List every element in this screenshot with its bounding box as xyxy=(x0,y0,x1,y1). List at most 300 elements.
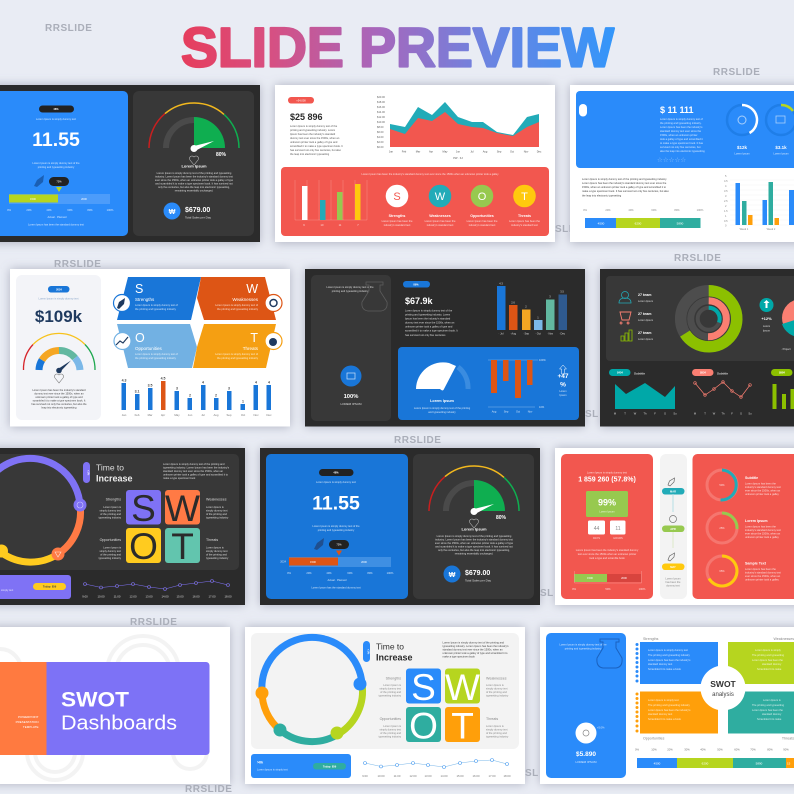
line chart: Th xyxy=(721,412,725,416)
panel: donut: Lorem Ipsum xyxy=(638,299,653,303)
panel: blue gauge: % xyxy=(560,382,566,388)
panel: red KPI: 50% xyxy=(605,587,611,591)
panel: ring and SWOT: of the printing and xyxy=(486,690,507,694)
panel: ring and SWOT: simply dummy text xyxy=(380,728,401,732)
panel: ring and SWOT: standard dummy text ever since the 1500s, when an xyxy=(163,469,224,473)
line chart: W xyxy=(713,412,716,416)
SWOT hexagons: Lorem Ipsum is simply dummy text of xyxy=(215,352,258,356)
slide 12: SWOT analysis: 70% xyxy=(750,748,756,752)
panel: gauge: Lorem Ipsum xyxy=(181,164,207,168)
bar chart: 1 xyxy=(537,316,539,320)
panel: blue KPI: Lorem Ipsum is simply dummy text of the xyxy=(312,524,360,528)
panel: gauge KPI: has survived not only five centuries, but also the xyxy=(31,402,87,406)
SWOT quadrants: Lorem Ipsum has been the xyxy=(752,658,783,662)
panel: blue flask KPI: LOREM IPSUM xyxy=(575,760,597,764)
panel: red SWOT: Lorem Ipsum has been the xyxy=(425,219,456,223)
panel: donut: Lorem Ipsum xyxy=(638,318,653,322)
panel: blue KPI: 1500 xyxy=(30,197,36,201)
bar chart: 5 xyxy=(725,174,727,178)
slide 5: dark bars and blue panel: dummy text ever since the 1500s, when an xyxy=(405,320,455,324)
line chart: 18:00 xyxy=(224,594,232,598)
panel: ring and SWOT: T xyxy=(451,706,474,746)
panel: flask KPI: printing and typesetting industry xyxy=(332,289,369,293)
SWOT quadrants: standard dummy xyxy=(762,662,782,666)
area chart: PW · KJ xyxy=(453,156,463,160)
monthly bar chart: Jul xyxy=(201,413,205,417)
panel: blue gauge: Lorem Ipsum is simply dummy text of the printing xyxy=(414,406,471,410)
SWOT quadrants: Threats xyxy=(782,736,794,740)
SWOT hexagons: Lorem Ipsum is simply dummy text of xyxy=(135,352,178,356)
panel: blue KPI: Actual · Planned xyxy=(327,578,347,582)
slide 5: dark bars and blue panel: $67.9k xyxy=(405,296,434,306)
panel: red KPI: 44 xyxy=(594,526,599,532)
panel: gauge: 80% xyxy=(496,515,507,521)
panel: red SWOT: S xyxy=(393,191,401,203)
monthly bar chart: 3 xyxy=(176,386,178,390)
panel: red SWOT: 7 xyxy=(357,223,359,227)
panel: red KPI: 99% xyxy=(598,498,616,508)
bar chart xyxy=(497,282,567,336)
panel: ring and SWOT: Increase xyxy=(376,652,413,662)
panel: gauge: ₩ xyxy=(449,572,456,579)
SWOT quadrants: standard dummy xyxy=(762,712,782,716)
panel: blue header: ☆☆☆☆☆ xyxy=(657,156,686,164)
watermarks: RRSLIDE xyxy=(674,253,721,264)
SWOT quadrants: Lorem Ipsum has been the industry's xyxy=(648,658,691,662)
area chart: Oct xyxy=(510,150,514,154)
area chart: Th xyxy=(643,412,647,416)
slide 3: blue header with rings: Lorem Ipsum is simply dummy text of the printing and typesetting industry. xyxy=(582,177,667,181)
monthly bar chart: Dec xyxy=(267,413,272,417)
bar chart: 3.5 xyxy=(724,189,728,193)
slide 3: blue header with rings xyxy=(570,85,794,242)
slide 6: donut dashboard xyxy=(600,269,794,426)
area chart: $12.00 xyxy=(377,115,385,119)
line chart: T xyxy=(704,412,706,416)
panel: gauge KPI: unknown printer took a galley of type and xyxy=(35,395,83,399)
panel: gauge: only five centuries, but also the leap into electronic typesetting, xyxy=(438,548,510,552)
watermarks: SLI xyxy=(555,224,572,235)
panel: ring and SWOT: Opportunities xyxy=(100,538,121,542)
line chart: 13:00 xyxy=(146,594,153,598)
SWOT quadrants: Lorem Ipsum is xyxy=(763,698,781,702)
panel: ring and SWOT xyxy=(0,454,239,570)
panel: red SWOT: Opportunities xyxy=(470,214,494,218)
bar chart: 2.5 xyxy=(724,199,728,203)
panel: ring and SWOT: simply dummy text xyxy=(380,686,401,690)
area chart: Su xyxy=(673,412,677,416)
panel: ring and SWOT: of the printing and xyxy=(486,731,507,735)
panel: ring and SWOT: simply dummy text xyxy=(486,686,508,690)
panel: blue KPI xyxy=(0,91,128,236)
panel: blue flask KPI xyxy=(546,633,626,778)
area chart: Jul xyxy=(470,150,474,154)
slide 5: dark bars and blue panel: 89% xyxy=(413,282,419,286)
area chart xyxy=(614,383,677,416)
panel: blue KPI: 2024 xyxy=(280,560,287,564)
panel: blue KPI: 0% xyxy=(287,571,292,575)
panel: timeline: has been the xyxy=(666,580,681,584)
SWOT hexagons: Weaknesses xyxy=(232,297,259,302)
panel: blue KPI: 1500 xyxy=(310,560,316,564)
panel: progress rings: unknown printer took a galley xyxy=(745,578,779,582)
orange band: PRESENTATION xyxy=(16,720,38,724)
panel: ring and SWOT: of the printing and xyxy=(380,690,402,694)
SWOT quadrants: The printing and typesetting xyxy=(752,653,785,657)
panel: ring and SWOT: Increase xyxy=(96,474,133,484)
panel: ring and SWOT: Lorem Ipsum is xyxy=(383,724,402,728)
bar chart: 4.3 xyxy=(499,282,503,286)
SWOT quadrants: Scrambled it to make a book xyxy=(648,717,682,721)
green bars xyxy=(772,384,794,409)
panel: gauge KPI: Lorem Ipsum has been the industry's standard xyxy=(32,388,86,392)
panel: ring and SWOT: of the printing and xyxy=(100,512,122,516)
area chart: $14.00 xyxy=(377,110,385,114)
panel: timeline: MAY xyxy=(670,565,676,569)
monthly bar chart: 4 xyxy=(255,380,257,384)
panel: progress rings: Sample Text xyxy=(745,562,767,566)
SWOT quadrants: Scrambled it to make a book xyxy=(648,667,682,671)
panel: red KPI: DAYS xyxy=(593,536,600,540)
line chart: 9:00 xyxy=(362,774,368,778)
panel: blue KPI: 11.55 xyxy=(32,129,80,151)
panel: gauge: Lorem Ipsum is simply dummy text of the printing and typesetting xyxy=(157,171,232,175)
panel: blue KPI: 60% xyxy=(347,571,353,575)
panel: progress rings: unknown printer took a galley xyxy=(745,492,779,496)
panel: ring and SWOT: Lorem Ipsum is xyxy=(206,505,224,509)
slide 2: area chart and SWOT: dummy text ever since the 1500s, when an xyxy=(290,136,340,140)
slide 2: area chart and SWOT: unknown printer took a galley of type and xyxy=(290,140,338,144)
line chart: 11:00 xyxy=(114,594,121,598)
line chart: 12:00 xyxy=(410,774,417,778)
area chart: Jun xyxy=(456,150,461,154)
line chart: M xyxy=(694,412,696,416)
line chart xyxy=(82,580,232,598)
panel: ring and SWOT: typesetting industry xyxy=(379,694,402,698)
slide 6: donut dashboard: Subtitle xyxy=(634,372,645,376)
bar chart: · Jul xyxy=(499,332,504,336)
slide 12: SWOT analysis: 10% xyxy=(651,748,657,752)
panel: progress rings: industry's standard dummy text xyxy=(745,528,781,532)
panel: blue KPI: 100% xyxy=(387,571,394,575)
panel: ring and SWOT: make a type specimen book xyxy=(163,476,196,480)
panel: blue header: Lorem Ipsum xyxy=(734,152,750,156)
panel: blue KPI: Lorem Ipsum is simply dummy text xyxy=(36,117,76,121)
callout: today: simply text xyxy=(1,588,14,592)
slide 5: dark bars and blue panel: printing and typesetting industry. Lorem xyxy=(405,312,450,316)
slide 2: area chart and SWOT: scrambled it to make a type specimen book. It xyxy=(290,144,343,148)
SWOT quadrants: Lorem Ipsum is simply text xyxy=(648,698,679,702)
slide 12: SWOT analysis: 60% xyxy=(734,748,740,752)
panel: gauge: and scrambled it to make a type specimen book. It has survived not xyxy=(155,182,233,186)
panel: timeline xyxy=(660,454,687,599)
panel: ring and SWOT: Threats xyxy=(206,538,218,542)
area chart: F xyxy=(654,412,656,416)
panel: ring and SWOT: typesetting industry xyxy=(486,734,509,738)
panel: blue KPI xyxy=(266,454,408,599)
line chart: 9:00 xyxy=(82,594,88,598)
SWOT quadrants: Lorem Ipsum has been the industry's xyxy=(648,708,691,712)
callout: today: Lorem Ipsum is simply text xyxy=(257,768,288,772)
panel: blue gauge: and typesetting industry xyxy=(428,410,456,414)
SWOT hexagons: T xyxy=(250,331,258,345)
slide 3: blue header with rings: 60% xyxy=(651,208,657,212)
panel: blue gauge: Ipsum xyxy=(559,393,567,397)
monthly bar chart: 4 xyxy=(202,380,204,384)
panel: blue KPI: 48% xyxy=(333,470,339,474)
callout: today: >Ilk xyxy=(257,760,263,764)
bar chart: 4 xyxy=(725,184,727,188)
bar chart: 1 xyxy=(725,214,727,218)
stacked bar xyxy=(585,218,700,228)
panel: red SWOT: Threats xyxy=(518,214,531,218)
area chart: $18.00 xyxy=(377,100,385,104)
bar chart: · Aug xyxy=(510,332,517,336)
monthly bar chart: Oct xyxy=(241,413,245,417)
panel: progress rings: Lorem Ipsum has been the xyxy=(745,482,776,486)
panel: blue gauge: 10% xyxy=(539,405,545,409)
stacked bar: 6200 xyxy=(702,762,709,766)
purple heading: Dashboards xyxy=(61,712,177,734)
SWOT quadrants: Lorem Ipsum is simply xyxy=(755,648,782,652)
panel: donut: 27 team xyxy=(638,312,651,316)
slide 12: SWOT analysis: 0% xyxy=(635,748,640,752)
slide 2: area chart and SWOT: $25 896 xyxy=(290,112,323,122)
SWOT hexagons: Lorem Ipsum is simply dummy text of xyxy=(215,303,258,307)
panel: blue gauge: Aug xyxy=(492,410,497,414)
panel: ring and SWOT: Lorem Ipsum is simply dummy text of the printing and xyxy=(163,462,225,466)
panel: red SWOT: Lorem Ipsum has been the xyxy=(509,219,540,223)
panel: red KPI: 2000 xyxy=(621,576,627,580)
line chart: 10:00 xyxy=(378,774,385,778)
bar chart: · Nov xyxy=(547,332,554,336)
line chart: 15:00 xyxy=(176,594,184,598)
panel: progress rings: ever since the 1500s, when an xyxy=(745,574,781,578)
panel: red SWOT: 9 xyxy=(303,223,305,227)
area chart: $4.00 xyxy=(377,135,384,139)
panel: timeline: MAR xyxy=(670,490,676,494)
slide 3: blue header with rings: the leap into electronic typesetting xyxy=(582,194,622,198)
panel: red SWOT: Weaknesses xyxy=(429,214,451,218)
bar chart: · Dec xyxy=(559,332,566,336)
panel: blue KPI: 0% xyxy=(7,208,12,212)
stacked bar: 4500 xyxy=(654,762,661,766)
panel: timeline: Lorem Ipsum xyxy=(665,576,681,580)
panel: progress rings: 50% xyxy=(719,483,725,487)
slide 2: area chart and SWOT: printing and typesetting industry. Lorem xyxy=(290,128,335,132)
panel: ring and SWOT: Lorem Ipsum is xyxy=(486,724,504,728)
slide 6: donut dashboard: $454 xyxy=(617,370,623,374)
SWOT quadrants: Strengths xyxy=(643,637,659,641)
panel: blue gauge: Lorem Ipsum xyxy=(430,399,455,403)
watermarks: SL xyxy=(540,588,554,599)
panel: ring and SWOT: W xyxy=(445,667,480,708)
panel: blue header: the printing and typesetting industry. xyxy=(660,121,702,125)
line chart: 15:00 xyxy=(456,774,464,778)
SWOT quadrants: Scrambled it to make xyxy=(757,667,782,671)
SWOT quadrants: analysis xyxy=(712,692,734,698)
panel: gauge: Total Sales per Day xyxy=(185,216,212,220)
panel: ring and SWOT: simply dummy text xyxy=(206,508,228,512)
panel: blue header: $ 11 111 xyxy=(660,105,694,115)
panel: donut: Lorem Ipsum xyxy=(638,337,653,341)
stacked bar: 15 xyxy=(787,762,791,766)
panel: ring and SWOT: W xyxy=(165,488,200,529)
SWOT quadrants: standard dummy text xyxy=(648,662,672,666)
slide 5: dark bars and blue panel: scrambled it to make a type specimen book. It xyxy=(405,328,458,332)
monthly bar chart: 4.5 xyxy=(161,376,165,380)
panel: ring and SWOT: Lorem Ipsum is xyxy=(103,546,122,550)
panel: red KPI: 1500 xyxy=(587,576,593,580)
panel: gauge: and scrambled it to make a type specimen book. It has survived not xyxy=(435,544,513,548)
panel: blue KPI: 75% xyxy=(56,180,62,184)
panel: red SWOT xyxy=(281,167,549,236)
slide 1: dark gauge dashboard xyxy=(0,85,260,242)
slide 10: cover xyxy=(0,627,230,784)
SWOT quadrants: Lorem Ipsum is simply dummy text xyxy=(648,648,688,652)
panel: flask KPI xyxy=(311,275,391,421)
panel: blue KPI: 80% xyxy=(367,571,373,575)
line chart: 14:00 xyxy=(162,594,169,598)
panel: donut: Ipsum xyxy=(763,328,770,332)
panel: red SWOT: T xyxy=(521,191,528,203)
slide 12: SWOT analysis: 30% xyxy=(684,748,690,752)
area chart: May xyxy=(443,150,448,154)
slide 3: blue header with rings: Lorem Ipsum has been the industry's standard dummy text ever since the xyxy=(582,181,667,185)
panel: gauge: Total Sales per Day xyxy=(465,578,492,582)
panel: blue flask KPI: printing and typesetting industry xyxy=(565,646,602,650)
panel: blue gauge: Oct xyxy=(516,410,520,414)
panel: blue gauge: 100% xyxy=(539,358,546,362)
line chart: 17:00 xyxy=(488,774,496,778)
line chart: Su xyxy=(748,412,752,416)
panel: red KPI: 100% xyxy=(639,587,646,591)
panel: timeline: APR xyxy=(670,527,676,531)
orange band xyxy=(0,662,46,755)
panel: gauge xyxy=(413,454,534,599)
SWOT hexagons: Threats xyxy=(243,346,259,351)
SWOT hexagons: Opportunities xyxy=(135,346,163,351)
panel: ring and SWOT: typesetting industry xyxy=(379,734,402,738)
slide 7: dark time to increase xyxy=(0,448,245,605)
panel: ring and SWOT: typesetting industry. Lorem Ipsum has been the industry's xyxy=(442,644,509,648)
slide 3: blue header with rings: 80% xyxy=(674,208,680,212)
panel: red KPI: Lorem Ipsum is simply dummy text xyxy=(587,470,627,474)
panel: donut: 27 team xyxy=(638,293,651,297)
panel: blue header: $12k xyxy=(737,145,748,150)
slide 5: dark bars and blue panel: unknown printer took a galley of type and xyxy=(405,324,453,328)
monthly bar chart: Aug xyxy=(214,413,219,417)
panel: blue header: Lorem Ipsum has been the industry's xyxy=(660,125,703,129)
orange band: TEMPLATE xyxy=(23,725,38,729)
panel: ring and SWOT: make a type specimen book xyxy=(442,654,475,658)
panel: ring and SWOT: Time to xyxy=(376,642,404,652)
panel: flask KPI: Lorem Ipsum is simply dummy text of the xyxy=(326,285,374,289)
panel: blue KPI: 20% xyxy=(306,571,312,575)
monthly bar chart: 2 xyxy=(215,394,217,398)
panel: ring and SWOT: T xyxy=(171,526,194,567)
panel: gauge: ₩ xyxy=(169,209,176,216)
panel: red SWOT: W xyxy=(435,191,446,203)
panel: gauge KPI: 2024 xyxy=(56,288,62,292)
monthly bar chart: Nov xyxy=(254,413,259,417)
line chart: F xyxy=(731,412,733,416)
bar chart: 0.5 xyxy=(724,219,728,223)
monthly bar chart: Jun xyxy=(188,413,193,417)
bar chart: 4.5 xyxy=(724,179,728,183)
panel: progress rings: Subtitle xyxy=(745,476,758,480)
area chart: M xyxy=(614,412,616,416)
panel: blue KPI: 48% xyxy=(53,107,59,111)
slide 2: area chart and SWOT: Lorem Ipsum is simply dummy text of the xyxy=(290,124,338,128)
panel: ring and SWOT: Lorem Ipsum is xyxy=(486,683,504,687)
bar chart: 3.5 xyxy=(560,290,564,294)
panel: ring and SWOT: typesetting industry xyxy=(206,516,229,520)
SWOT hexagons: S xyxy=(135,282,143,296)
panel: ring and SWOT: simply dummy text xyxy=(100,549,121,553)
panel: red KPI: 1 859 260 (57.8%) xyxy=(578,476,636,484)
panel: red KPI: HOURS xyxy=(613,536,623,540)
panel: blue header: survived not only five centuries, but xyxy=(660,145,701,149)
panel: blue header: also the leap into electronic typesetting xyxy=(660,149,705,153)
slide 3: blue header with rings: 1500s, when an unknown printer took a galley of type and scrambled it to xyxy=(582,185,666,189)
monthly bar chart: Mar xyxy=(148,413,152,417)
area chart xyxy=(377,95,542,160)
area chart: $8.00 xyxy=(377,125,384,129)
stacked bar: 5890 xyxy=(756,762,763,766)
panel: gauge: Lorem Ipsum xyxy=(461,526,487,532)
panel: progress rings: 25% xyxy=(719,526,725,530)
panel: ring and SWOT: Threats xyxy=(486,717,498,721)
SWOT quadrants: Lorem Ipsum has been the xyxy=(752,708,783,712)
panel: donut: · Project xyxy=(781,347,791,351)
monthly bar chart: Apr xyxy=(161,413,165,417)
panel: ring and SWOT: of the printing and xyxy=(380,731,402,735)
panel: red KPI: Lorem Ipsum has been the industry's standard dummy xyxy=(576,548,639,552)
stacked bar: 4500 xyxy=(598,222,605,226)
panel: gauge: remaining essentially unchanged. xyxy=(175,188,214,192)
slide 6: donut dashboard: $934 xyxy=(700,370,706,374)
bar chart xyxy=(724,174,794,231)
SWOT hexagons: Strengths xyxy=(135,297,155,302)
slide 12: SWOT analysis: 20% xyxy=(667,748,673,752)
slide 2: area chart and SWOT: the leap into electronic typesetting xyxy=(290,152,330,156)
panel: blue flask KPI: Lorem Ipsum is simply dummy text of the xyxy=(559,642,607,646)
bar chart: 3 xyxy=(725,194,727,198)
panel: blue gauge: Sep xyxy=(504,410,509,414)
slide 3: blue header with rings: 100% xyxy=(697,208,704,212)
panel: gauge KPI: scrambled it to make a type specimen book. It xyxy=(33,398,86,402)
monthly bar chart: 1 xyxy=(242,400,244,404)
panel: blue header: to make a type specimen book. It has xyxy=(660,141,704,145)
area chart: T xyxy=(624,412,626,416)
SWOT quadrants: Scrambled it to make xyxy=(757,717,782,721)
area chart: $10.00 xyxy=(377,120,385,124)
slide 2: area chart and SWOT xyxy=(275,85,555,242)
SWOT hexagons: the printing and typesetting industry xyxy=(217,356,259,360)
purple heading xyxy=(46,662,210,755)
SWOT quadrants xyxy=(636,637,794,740)
line chart: S xyxy=(740,412,742,416)
panel: blue gauge: +47 xyxy=(557,373,569,380)
SWOT quadrants: Opportunities xyxy=(643,736,665,740)
bar chart: Week 2 xyxy=(767,227,776,231)
panel: red KPI: took a type and scramble book xyxy=(589,556,625,560)
panel: ring and SWOT: O xyxy=(129,526,158,567)
panel: donut: 27 team xyxy=(638,331,651,335)
panel: gauge: 80% xyxy=(216,152,227,158)
panel: ring and SWOT: S xyxy=(411,667,436,708)
